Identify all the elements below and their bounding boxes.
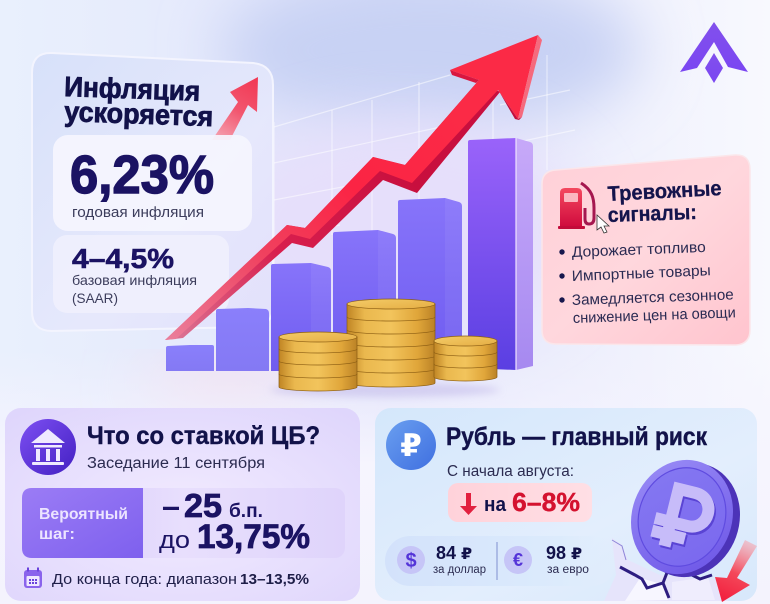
bar 5 — [398, 198, 462, 365]
bar 3 — [271, 263, 331, 371]
cracked ground — [604, 538, 728, 601]
value: 4–4,5% — [72, 243, 174, 274]
value: target rate: 13,75% — [197, 518, 310, 556]
panel: ruble risk — [375, 408, 757, 602]
ruble coin — [615, 445, 756, 592]
bullet 3: Замедляется сезонное — [572, 286, 734, 309]
bar 6 — [468, 138, 533, 370]
right coin stack — [434, 336, 497, 381]
icon: ruble circle — [386, 420, 436, 470]
card: core inflation: (SAAR) — [72, 290, 118, 306]
caption: годовая инфляция — [72, 205, 204, 221]
label: Вероятный — [39, 506, 128, 523]
left coin stack — [279, 332, 357, 391]
likely step box — [22, 487, 345, 558]
heading — [607, 177, 722, 227]
value: minus 25 bp: б.п. — [229, 501, 263, 522]
coin shadow — [270, 383, 500, 397]
year-end range: До конца года: диапазон — [52, 571, 237, 588]
falling arrow — [715, 540, 757, 602]
icon: bank — [20, 419, 76, 475]
bullet 2: Импортные товары — [571, 262, 711, 285]
heading: Что со ставкой ЦБ? — [87, 422, 320, 450]
callout: ruble decline: 6–8% — [512, 487, 580, 517]
currency rates — [385, 536, 617, 586]
panel background — [32, 53, 273, 331]
year-end range — [52, 571, 309, 588]
value: 6,23% — [70, 145, 214, 205]
subheading: Заседание 11 сентября — [87, 455, 265, 472]
caption: базовая инфляция — [72, 272, 197, 288]
logo — [680, 22, 748, 83]
euro rate: € — [513, 550, 523, 570]
bar 1 — [166, 345, 214, 371]
panel: inflation — [32, 53, 273, 331]
since August: С начала августа: — [447, 463, 574, 480]
dollar rate: $ — [405, 550, 417, 572]
dollar rate: за доллар — [433, 564, 486, 576]
bar chart — [166, 138, 533, 371]
value: target rate: до — [159, 527, 190, 554]
panel background — [5, 408, 360, 601]
label — [39, 506, 128, 543]
heading — [64, 71, 214, 132]
cursor — [597, 215, 609, 233]
panel background — [542, 155, 750, 345]
small arrow — [212, 77, 258, 140]
icon: ruble circle: ₽ — [400, 428, 422, 464]
dollar rate: 84 ₽ — [436, 543, 472, 563]
bullet 1: Дорожает топливо — [572, 239, 706, 261]
value: minus 25 bp: – — [162, 488, 180, 524]
bar 2 — [216, 308, 269, 371]
heading: Инфляция — [64, 71, 201, 107]
heading: ускоряется — [64, 96, 214, 132]
value: minus 25 bp — [162, 487, 263, 524]
coin stacks — [279, 299, 497, 391]
callout: ruble decline: на — [484, 494, 507, 516]
heading: Рубль — главный риск — [446, 423, 707, 451]
year-end range: 13–13,5% — [240, 571, 309, 588]
label: шаг: — [39, 526, 75, 543]
bullet 3: снижение цен на овощи — [573, 304, 736, 327]
card: annual inflation — [53, 135, 252, 231]
panel: central bank rate — [5, 408, 360, 601]
icon: fuel pump — [558, 183, 594, 229]
euro rate: 98 ₽ — [546, 543, 582, 563]
dollar rate — [397, 543, 486, 576]
icon: calendar — [24, 568, 42, 588]
bullet list — [559, 239, 736, 327]
icon: down arrow — [460, 493, 477, 515]
euro rate: за евро — [547, 564, 589, 576]
main rising arrow — [165, 35, 542, 340]
card: core inflation — [53, 235, 229, 313]
value: minus 25 bp: 25 — [184, 487, 222, 524]
bar 4 — [333, 230, 396, 360]
heading: Тревожные — [607, 177, 722, 206]
icon: coin ruble sign — [648, 485, 714, 557]
background grid — [274, 55, 575, 340]
panel background — [375, 408, 757, 601]
panel: warning signals — [542, 155, 750, 345]
heading: сигналы: — [607, 201, 697, 227]
bullet 3 — [559, 286, 736, 327]
callout: ruble decline — [448, 483, 592, 522]
center coin stack — [347, 299, 435, 387]
euro rate — [504, 543, 589, 576]
